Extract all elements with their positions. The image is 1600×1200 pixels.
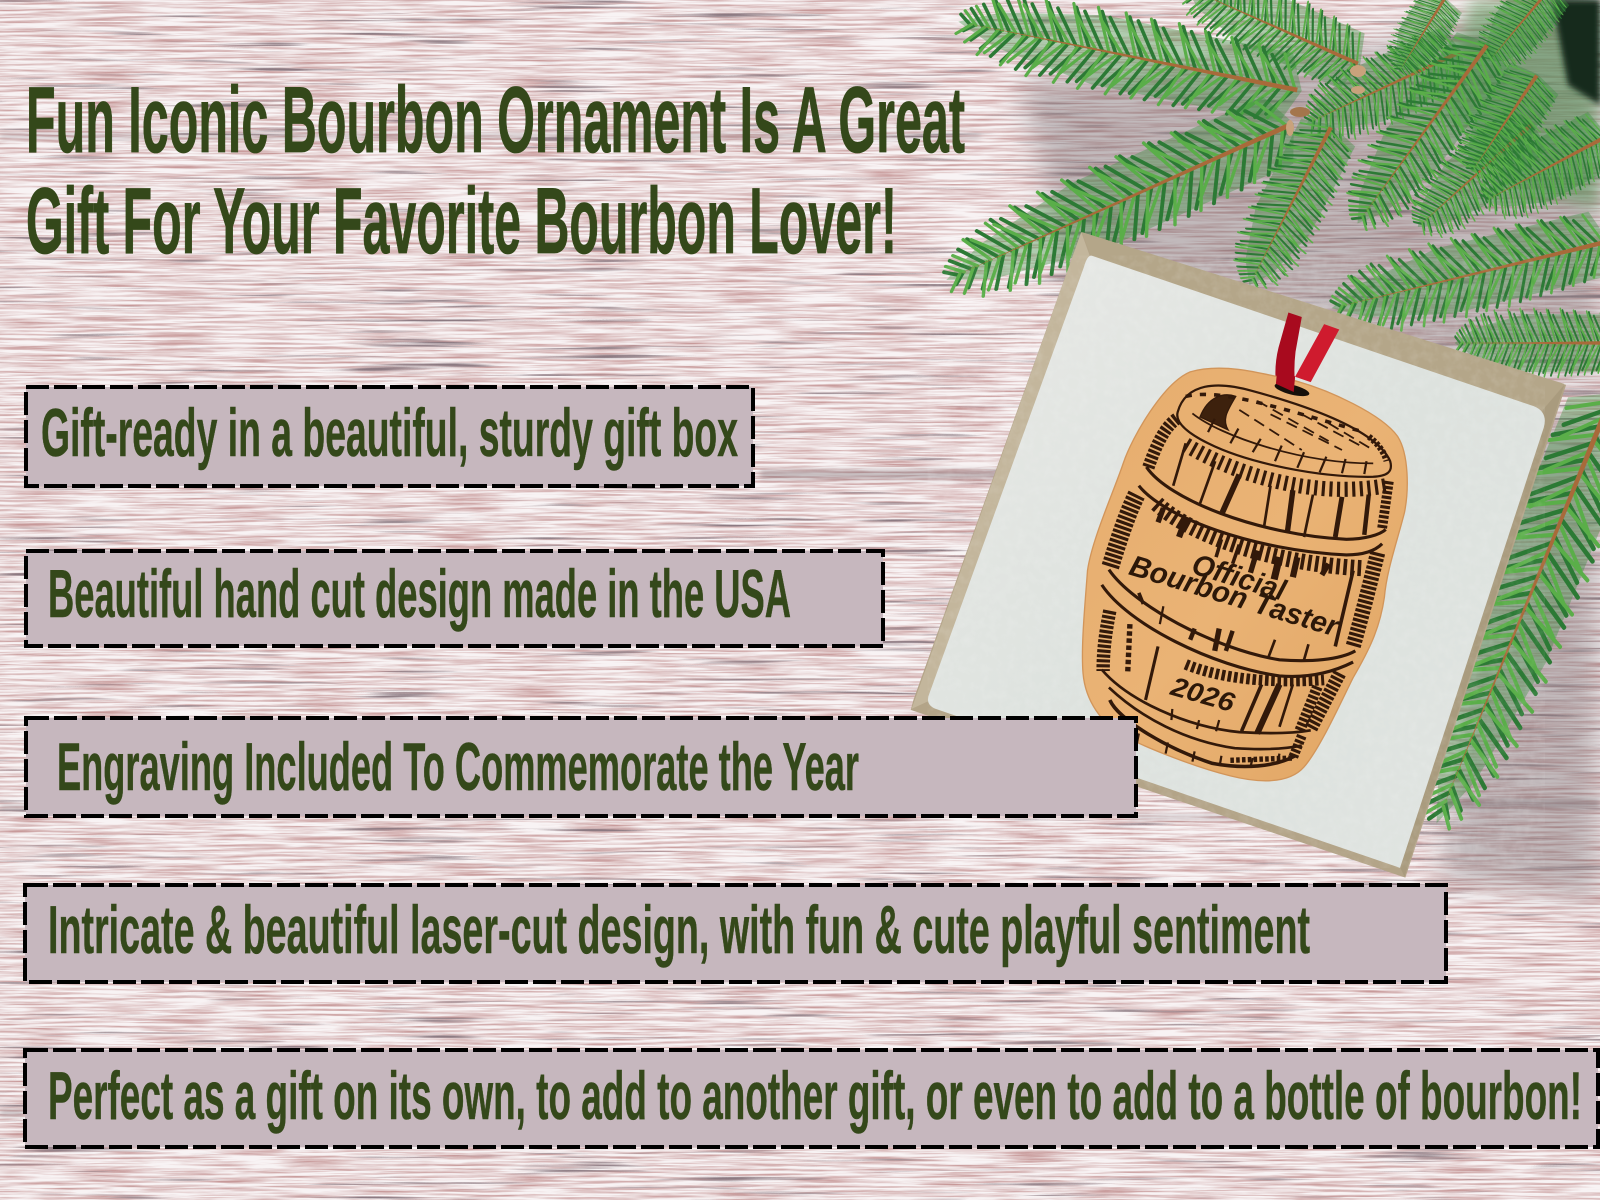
text: 2026: 2026 [1166,671,1239,718]
panel: engraving [26,718,1136,816]
branch: left long [928,83,1312,320]
panel: gift-ready: Gift-ready in a beautiful, sturdy gift box [41,395,738,471]
ribbon hole [1273,381,1310,399]
branch: top middle [1377,0,1468,86]
middle staves shading [1110,495,1378,660]
branch: top far [1465,0,1576,81]
box paper liner [928,256,1545,868]
ornament wood shape [1082,368,1407,781]
barrel rim [1177,385,1391,477]
text: Bourbon Taster: Bourbon Taster [1126,549,1344,644]
panel: gift-ready [26,387,753,486]
upper staves [1148,419,1389,537]
engraved text [1126,548,1344,718]
box walls [911,232,1566,878]
branch: central stem [1292,19,1477,156]
branch: top left [950,0,1310,132]
barrel bottom [1110,700,1295,766]
hoop one [1146,467,1386,539]
branch: filler behind centre [1395,98,1556,252]
branch: hanging centre [1217,109,1364,302]
panel: engraving: Engraving Included To Commemorate the Year [57,729,859,805]
pine branches [928,0,1600,841]
branch: upper right [1443,55,1566,191]
branch: right mid [1468,104,1600,233]
hoop two [1109,570,1355,661]
title [26,67,965,273]
pine branch shadow [1020,0,1600,900]
branch: small lower right [1455,309,1600,377]
branch: far right lower, behind box [1393,375,1600,841]
branch: long lower right [1322,202,1600,347]
gift box with ornament [911,232,1566,878]
branch: centre right [1327,21,1519,246]
pine buds [1286,65,1366,136]
panel: hand cut: Beautiful hand cut design made in the USA [48,556,791,632]
branch: top centre [1170,0,1375,98]
barrel engraving [1102,385,1391,767]
lower staves [1103,611,1340,733]
panel: hand cut [26,551,883,646]
hoop three [1102,670,1311,733]
ribbon [1275,313,1339,393]
text: Official: Official [1188,548,1290,608]
